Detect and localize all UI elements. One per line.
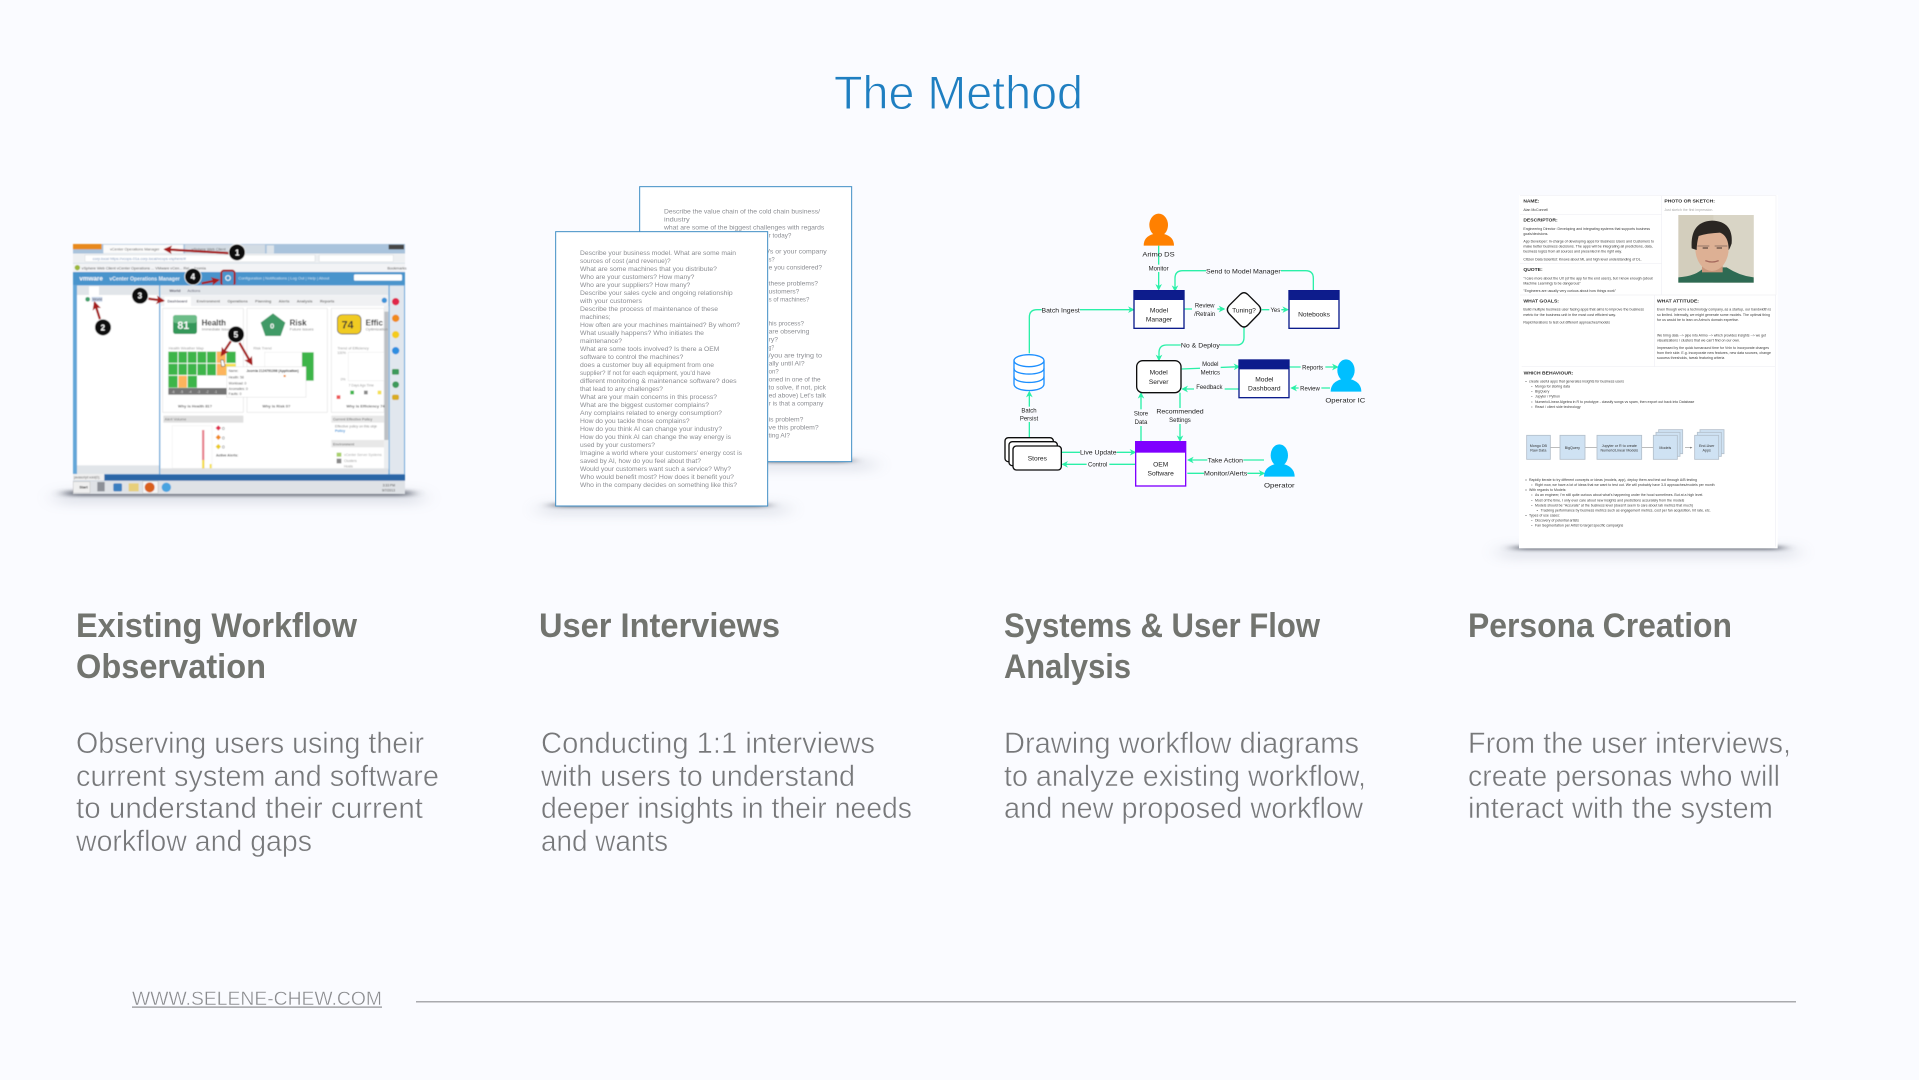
vcops header: vmware	[79, 275, 103, 282]
back page: s of machines?	[769, 297, 809, 304]
risk badge: 0	[270, 321, 274, 330]
persona identity: business logics from all sources and presented in the right way.	[1523, 250, 1622, 254]
efficiency trend: 7 Days Ago Time	[349, 384, 374, 388]
front page: Any complains related to energy consumption?	[580, 410, 722, 417]
which behaviour: Tracking performance by business metrics such as engagement metrics, cost per fan acquisition, hit rate, etc.	[1541, 508, 1711, 512]
connector labels: Model	[1202, 362, 1218, 368]
browser chrome: vSphere Web Client vCenter Operations ... VMware vCen... Rei... Joomla	[82, 266, 207, 270]
which behaviour: Models should be "Accurate" at the business level (doesn't seem to care about lab metrics that much)	[1535, 503, 1693, 507]
connector labels: Monitor/Alerts	[1204, 472, 1247, 478]
what attitude: from their side. E.g. incorporate new features, new data sources, change	[1657, 351, 1771, 355]
effective policy and environment: Effective policy on this obje	[335, 424, 377, 428]
back page: Describe the value chain of the cold chain business/	[664, 209, 820, 216]
mini pipeline diagram: End-User	[1699, 444, 1715, 448]
left panel: World	[92, 298, 102, 302]
box: Model Server	[1137, 361, 1181, 393]
mini pipeline diagram: Models	[1659, 446, 1671, 450]
flow connectors	[1029, 246, 1337, 473]
icon: Operator IC person: Operator IC	[1325, 398, 1366, 405]
connector labels: Batch	[1021, 408, 1037, 414]
front page: What are the biggest customer complains?	[580, 402, 709, 409]
risk trend: Risk Trend	[253, 346, 272, 350]
front page: Who would benefit most? How does it benefit you?	[580, 474, 734, 481]
front page: maintenance?	[580, 338, 622, 345]
connector labels: Review	[1300, 386, 1320, 392]
column 2 body: deeper insights in their needs	[541, 792, 912, 825]
column 1 body: current system and software	[76, 760, 439, 793]
icon: Arimo DS person: Arimo DS	[1142, 251, 1175, 258]
which behaviour: Types of use cases:	[1529, 513, 1560, 517]
front page: Who are your suppliers? How many?	[580, 282, 691, 289]
alert volume	[163, 416, 243, 468]
risk badge: Risk	[290, 318, 307, 327]
efficiency badge: Optimization	[366, 327, 388, 332]
risk badge	[261, 313, 314, 336]
persona identity: make better business decisions. The apps will be integrating all predictions, data,	[1523, 245, 1653, 249]
persona identity: "I care more about the UX (of the app for the end users), but I know enough (about	[1523, 276, 1653, 280]
numbered callouts	[95, 244, 245, 343]
connector labels: Metrics	[1201, 370, 1220, 376]
back page: are observing	[769, 329, 810, 336]
box: Notebooks	[1289, 291, 1339, 328]
effective policy and environment: vCenter Server Systems	[344, 453, 382, 457]
front page: How do you tackle those complains?	[580, 418, 690, 425]
persona identity: App Developer: In-charge of developing apps for Business Users and Customers to	[1523, 240, 1654, 244]
persona identity: Alan McConnell	[1523, 208, 1548, 212]
health badge: 81	[177, 320, 189, 332]
front page: with your customers	[579, 298, 643, 305]
vcops header: Configuration | Notifications | Log Out | Help | About	[238, 275, 330, 280]
vcops header: vCenter Operations Manager	[109, 276, 180, 282]
persona identity: Engineering Director: Developing and integrating systems that supports business	[1523, 227, 1650, 231]
icon: database	[1014, 355, 1044, 390]
main panel: World	[169, 288, 181, 293]
health weather map: Health Weather Map	[169, 346, 204, 350]
main panel: Dashboard	[167, 299, 188, 303]
panel: systems flow diagram	[1005, 214, 1366, 489]
panel: persona document	[1500, 195, 1797, 557]
box: Model Manager: Manager	[1146, 316, 1173, 323]
front page: different monitoring & maintenance software? does	[580, 378, 737, 385]
box: OEM Software: Software	[1148, 471, 1174, 478]
main panel: Actions	[187, 288, 200, 293]
which behaviour: Rapidly iterate to try different concepts or ideas (models, app), deploy them and test out through A/B testing	[1529, 478, 1697, 482]
why links: Why is Efficiency 74	[346, 404, 385, 409]
front page: that lead to any challenges?	[580, 386, 663, 393]
back page: ed above) Let's talk	[769, 393, 827, 400]
front page: software to control the machines?	[580, 354, 684, 361]
connector labels: Live Update	[1080, 451, 1117, 457]
effective policy and environment: Policy	[335, 429, 345, 433]
what goals: metric for the business unit in the most cost efficient way.	[1523, 313, 1616, 317]
browser chrome: vSphere Web Client	[192, 247, 227, 251]
left panel	[77, 286, 159, 474]
tooltip: Anomalies: 0	[229, 387, 248, 391]
alert volume: 0	[222, 426, 225, 432]
efficiency badge: Effic	[366, 318, 384, 327]
front page	[556, 232, 768, 506]
what goals	[1523, 299, 1644, 324]
front page: Who are your customers? How many?	[580, 274, 695, 281]
front page: sources of cost (and revenue)?	[580, 258, 671, 265]
alert volume: Active Alerts:	[216, 454, 238, 458]
column 4 body: interact with the system	[1468, 792, 1773, 825]
risk badge: Future issues	[290, 327, 314, 332]
which behaviour: Jupyter / Python	[1535, 395, 1560, 399]
efficiency badge	[337, 315, 388, 334]
persona photo	[1664, 199, 1754, 283]
column 4 body: From the user interviews,	[1468, 727, 1791, 760]
front page: Describe your sales cycle and ongoing relationship	[580, 290, 733, 297]
connector labels: Take Action	[1208, 459, 1243, 465]
back page: on?	[769, 369, 779, 376]
connector labels	[1019, 265, 1325, 478]
box: OEM Software: OEM	[1153, 462, 1168, 469]
health badge: Immediate issues	[202, 327, 233, 332]
browser chrome: Bookmarks	[387, 266, 407, 270]
taskbar: 9/7/2013	[382, 488, 395, 492]
browser chrome: corp.local https://vcops-01a.corp.local/vcops-vsphere/#	[93, 257, 187, 261]
back page: s?	[769, 257, 775, 264]
back page: what are some of the biggest challenges with regards	[663, 225, 825, 232]
effective policy and environment	[331, 416, 384, 469]
front page: What are some tools involved? Is there a OEM	[580, 346, 720, 353]
box: Model Manager: Model	[1150, 307, 1169, 314]
footer link: WWW.SELENE-CHEW.COM	[132, 989, 382, 1010]
persona identity: Citizen Data Scientist: Knows about ML and high level understanding of DL.	[1523, 258, 1642, 262]
effective policy and environment: Hosts	[344, 465, 353, 469]
taskbar	[73, 474, 405, 494]
what attitude: visualizations / clusters that we can't find on our own.	[1657, 338, 1740, 342]
efficiency trend: Trend of Efficiency	[337, 346, 369, 350]
back page: e you considered?	[769, 265, 822, 272]
box: Notebooks: Notebooks	[1298, 312, 1331, 319]
connector labels: Review	[1195, 304, 1215, 310]
mini pipeline diagram: Raw Data	[1530, 448, 1547, 452]
back page: ally until AI?	[769, 361, 805, 368]
effective policy and environment: Environment	[333, 442, 355, 446]
connector labels: No & Deploy	[1181, 343, 1220, 349]
which behaviour: Mongo for storing data	[1535, 385, 1571, 389]
back page: g?	[769, 345, 774, 352]
cursor	[221, 360, 225, 367]
right status sidebar	[390, 286, 404, 474]
which behaviour: create useful apps that generates insights for business users	[1529, 380, 1624, 384]
persona identity	[1523, 199, 1654, 293]
persona identity: QUOTE:	[1523, 267, 1543, 272]
connector labels: Batch Ingest	[1041, 308, 1080, 314]
what goals: Rapid iterations to test out different approaches/models	[1523, 320, 1610, 324]
decision: Tuning: Tuning?	[1232, 307, 1256, 314]
column 2 body	[540, 727, 912, 858]
column 3 body: and new proposed workflow	[1004, 792, 1364, 825]
persona identity: NAME:	[1523, 199, 1540, 204]
connector labels: Monitor	[1149, 267, 1169, 273]
back page: ting AI?	[769, 433, 790, 440]
numbered callouts: 2	[101, 323, 106, 332]
column 4 body: create personas who will	[1468, 760, 1780, 793]
connector labels: /Retrain	[1194, 312, 1215, 318]
front page: How do you think AI can change your industry?	[580, 426, 722, 433]
alert volume: Alert Volume	[165, 418, 186, 422]
title: The Method	[834, 66, 1083, 119]
decision: Tuning	[1227, 293, 1261, 327]
column 3 heading	[1004, 607, 1321, 686]
effective policy and environment: Current Effective Policy	[333, 418, 372, 422]
connector labels: Data	[1135, 420, 1148, 426]
which behaviour	[1524, 370, 1715, 527]
tooltip: Workload: 0	[229, 382, 247, 386]
which behaviour: WHICH BEHAVIOUR:	[1524, 370, 1574, 375]
what attitude: success thresholds, tweak featuring criteria	[1657, 356, 1725, 360]
box: Model Server: Model	[1150, 370, 1168, 377]
health weather map	[168, 346, 236, 395]
box: Model Dashboard: Model	[1255, 376, 1274, 383]
which behaviour: Right now, we have a lot of ideas that we want to test out. We will probably have 3-5 approaches/models per month	[1535, 483, 1715, 487]
what attitude: We bring data --> pipe into Arimo --> which provides insights --> we get	[1657, 333, 1766, 337]
column 4 heading: Persona Creation	[1468, 607, 1732, 645]
front page: Describe your business model. What are some main	[580, 250, 736, 257]
persona photo: Just sketch the first impression.	[1664, 208, 1713, 212]
panel: interview documents	[540, 187, 873, 513]
column 2 body: Conducting 1:1 interviews	[541, 727, 875, 760]
connector labels: Control	[1088, 463, 1107, 469]
back page: r today?	[769, 233, 792, 240]
front page: does a customer buy all equipment from one	[580, 362, 714, 369]
front page: Describe the process of maintenance of these	[580, 306, 718, 313]
health badge	[173, 315, 233, 334]
column 2 heading: User Interviews	[539, 607, 780, 645]
what attitude: so limited. Internally, we might generate some models. The optimal thing	[1657, 313, 1770, 317]
which behaviour: Fan Segmentation per Artist to target specific campaigns	[1535, 523, 1623, 527]
box: Model Dashboard	[1239, 360, 1289, 398]
front page: Imagine a world where your customers' energy cost is	[580, 450, 743, 457]
icon: Operator person: Operator	[1264, 482, 1296, 489]
column 1 body	[75, 727, 439, 858]
callout arrows	[95, 249, 252, 364]
front page: How often are your machines maintained? By whom?	[580, 322, 740, 329]
mini pipeline diagram	[1527, 430, 1724, 459]
front page: What are your main concerns in this process?	[580, 394, 717, 401]
why links: Why is Health 81?	[178, 404, 213, 409]
column 1 body: workflow and gaps	[75, 825, 312, 858]
box: OEM Software	[1136, 442, 1186, 486]
column 1 body: to understand their current	[76, 792, 423, 825]
box: Model Dashboard: Dashboard	[1248, 385, 1281, 392]
back page: his process?	[769, 321, 804, 328]
connector labels: Reports	[1302, 365, 1323, 371]
what attitude: Even though we're a technology company, as a startup, our bandwidth is	[1657, 308, 1771, 312]
tooltip: Name:	[229, 369, 239, 373]
efficiency trend: 0%	[341, 378, 346, 382]
icon: Operator IC person	[1325, 359, 1366, 405]
tooltip: Joomla 2124791398 (Application)	[246, 369, 299, 373]
main panel	[160, 286, 389, 474]
front page: Would your customers want such a service? Why?	[580, 466, 731, 473]
back page: r is that a company	[769, 401, 824, 408]
persona identity: goals/decisions.	[1523, 232, 1548, 236]
column 2 body: and wants	[541, 825, 668, 858]
tooltip	[227, 367, 306, 397]
front page: supplier? If not for each equipment, you'd have	[580, 370, 711, 377]
health weather map: -6 -5 -4 -3 -2 -1	[172, 390, 217, 394]
taskbar: Start	[79, 486, 88, 490]
tooltip: Health: 58	[229, 375, 244, 379]
taskbar: javascript:void(0);	[73, 476, 100, 480]
back page: ry?	[769, 337, 778, 344]
back page: these problems?	[769, 281, 818, 288]
what goals: Build multiple business user facing apps that aims to improve the business	[1523, 308, 1644, 312]
tooltip: Faults: 0	[229, 392, 242, 396]
connector labels: Recommended	[1156, 410, 1204, 416]
which behaviour: React / client side technology	[1535, 405, 1581, 409]
connector labels: Settings	[1169, 418, 1191, 424]
persona identity: "Engineers are usually very curious about how things work"	[1523, 289, 1617, 293]
icon: Operator person	[1264, 444, 1296, 489]
risk trend	[253, 346, 314, 381]
connector labels: Yes	[1270, 308, 1280, 314]
efficiency trend: 100%	[337, 351, 346, 355]
which behaviour: Most of the time, I only ever care about new insights and predictions accurately from the models	[1535, 498, 1684, 502]
mini pipeline diagram: Numeric/Linear Models	[1601, 448, 1638, 452]
column 1 heading	[76, 607, 358, 686]
back page: industry	[664, 217, 690, 224]
back page: Vs or your company	[765, 249, 827, 256]
numbered callouts: 3	[138, 292, 143, 301]
back page: is problem?	[769, 417, 804, 424]
front page: How do you think AI can change the way energy is	[580, 434, 732, 441]
column 1 heading: Existing Workflow	[76, 607, 358, 645]
front page: machines;	[580, 314, 611, 321]
numbered callouts: 1	[235, 248, 240, 257]
which behaviour: With regards to Models:	[1529, 488, 1566, 492]
persona photo: PHOTO OR SKETCH:	[1664, 199, 1715, 204]
browser chrome: vCenter Operations Manager	[110, 247, 160, 251]
column 3 body	[1004, 727, 1366, 825]
panel: existing workflow screenshot	[57, 244, 422, 502]
stack: Stores	[1005, 438, 1061, 470]
back page: ustomers?	[769, 289, 800, 296]
why links	[178, 404, 385, 409]
what attitude: WHAT ATTITUDE:	[1657, 299, 1699, 304]
column 3 heading: Analysis	[1004, 648, 1131, 686]
persona identity: DESCRIPTOR:	[1523, 217, 1558, 222]
numbered callouts: 5	[234, 330, 239, 339]
what attitude: for us would be to lean on Arimo's domain expertise.	[1657, 318, 1739, 322]
mini pipeline diagram: Apps	[1702, 448, 1711, 452]
back page: /you are trying to	[769, 353, 822, 360]
mini pipeline diagram: BigQuery	[1565, 446, 1580, 450]
back page: oned in one of the	[769, 377, 821, 384]
effective policy and environment: Clusters	[344, 459, 357, 463]
connector labels: Store	[1134, 412, 1149, 418]
main panel: Environment Operations Planning Alerts Analysis Reports	[197, 299, 334, 303]
column 4 body	[1468, 727, 1791, 825]
browser chrome	[73, 244, 407, 272]
connector labels: Persist	[1020, 416, 1038, 422]
what attitude	[1657, 299, 1771, 360]
which behaviour: BigQuery	[1535, 390, 1549, 394]
column 3 body: Drawing workflow diagrams	[1004, 727, 1359, 760]
efficiency badge: 74	[342, 320, 354, 332]
what attitude: Impressed by the quick turnaround time for Vnln to incorporate changes	[1657, 346, 1769, 350]
back page: to solve, if not, pick	[769, 385, 827, 392]
box: Model Server: Server	[1149, 379, 1169, 386]
what goals: WHAT GOALS:	[1523, 299, 1559, 304]
box: Model Manager	[1134, 291, 1184, 328]
which behaviour: Discovery of potential artists	[1535, 518, 1579, 522]
column 3 body: to analyze existing workflow,	[1004, 760, 1366, 793]
front page: used by your customers?	[580, 442, 655, 449]
front page: Who in the company decides on something like this?	[580, 482, 737, 489]
connector labels: Feedback	[1196, 385, 1222, 391]
back page	[640, 187, 852, 462]
connector labels: Send to Model Manager	[1206, 270, 1281, 276]
column 1 body: Observing users using their	[76, 727, 424, 760]
numbered callouts: 4	[191, 273, 196, 282]
column 2 body: with users to understand	[540, 760, 855, 793]
front page: saved by AI, how do you feel about that?	[580, 458, 701, 465]
which behaviour: Numeric/Linear Algebra in R to prototype - classify songs vs spam, then export out back into Database	[1535, 400, 1694, 404]
alert volume: 0	[222, 445, 225, 451]
mini pipeline diagram: Mongo DB	[1530, 444, 1548, 448]
column 3 heading: Systems & User Flow	[1004, 607, 1321, 645]
health badge: Health	[202, 318, 226, 327]
front page: What usually happens? Who initiates the	[580, 330, 704, 337]
efficiency trend	[337, 346, 384, 399]
icon: Arimo DS person	[1142, 214, 1175, 258]
mini pipeline diagram: Jupyter or R to create	[1602, 444, 1637, 448]
persona identity: Machine Learning) to be dangerous"	[1523, 281, 1581, 285]
taskbar: 3:33 PM	[383, 484, 395, 488]
back page: ve this problem?	[769, 425, 819, 432]
stack: Stores: Stores	[1028, 455, 1048, 462]
which behaviour: As an engineer, I'm still quite curious about what's happening under the hood sometimes. But at a high level.	[1535, 493, 1703, 497]
vcops header	[73, 271, 405, 286]
front page: What are some machines that you distribute?	[580, 266, 717, 273]
column 1 heading: Observation	[76, 648, 266, 686]
alert volume: 0	[222, 435, 225, 441]
why links: Why is Risk 0?	[262, 404, 291, 409]
